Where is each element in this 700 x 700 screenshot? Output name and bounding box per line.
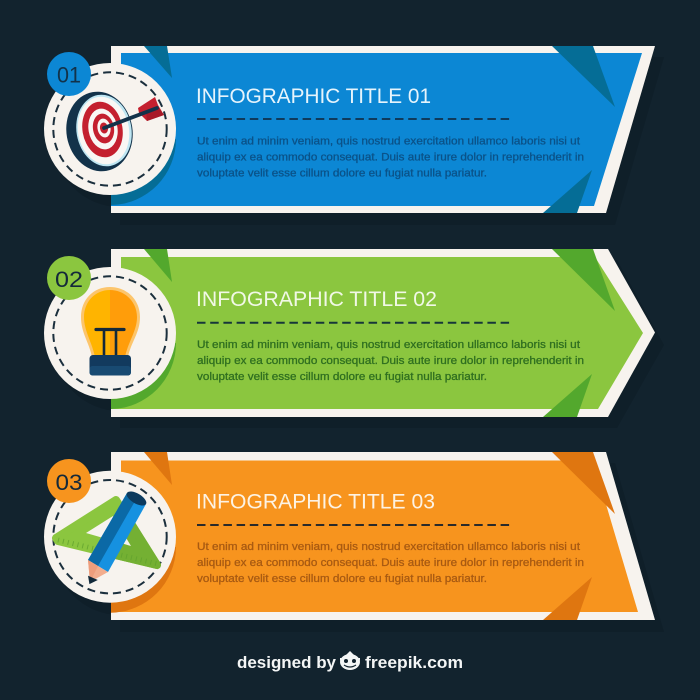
badge: number 03	[47, 459, 91, 503]
icon: freepik mascot	[340, 651, 360, 670]
icon: set square and pencil	[56, 489, 158, 583]
text block: body 02	[197, 339, 584, 383]
text block: body 02: Ut enim ad minim veniam, quis nostrud exercitation ullamco laboris nisi ut	[197, 339, 580, 351]
badge: number 03: 03	[56, 470, 82, 495]
heading: title 02: INFOGRAPHIC TITLE 02	[196, 288, 437, 311]
badge: number 02	[47, 256, 91, 300]
footer: designed by freepik.com: designed by	[237, 654, 337, 672]
icon: target with arrow	[60, 86, 164, 177]
badge: number 01: 01	[57, 62, 81, 88]
text block: body 01: Ut enim ad minim veniam, quis nostrud exercitation ullamco laboris nisi ut	[197, 136, 580, 148]
badge: number 02: 02	[55, 267, 83, 292]
text block: body 03: voluptate velit esse cillum dolore eu fugiat nulla pariatur.	[197, 573, 487, 585]
text block: body 01: voluptate velit esse cillum dolore eu fugiat nulla pariatur.	[197, 168, 487, 180]
footer: designed by freepik.com: freepik.com	[365, 654, 463, 672]
footer: designed by freepik.com	[237, 651, 463, 672]
text block: body 02: voluptate velit esse cillum dolore eu fugiat nulla pariatur.	[197, 371, 487, 383]
icon: light bulb	[81, 287, 140, 376]
text block: body 01	[197, 136, 584, 180]
heading: title 01: INFOGRAPHIC TITLE 01	[196, 85, 431, 108]
text block: body 03: Ut enim ad minim veniam, quis nostrud exercitation ullamco laboris nisi ut	[197, 541, 580, 553]
panel: banner 03	[44, 452, 664, 632]
text block: body 03	[197, 541, 584, 585]
panel: banner 01	[44, 46, 664, 225]
panel: banner 02	[44, 249, 664, 428]
heading: title 03: INFOGRAPHIC TITLE 03	[196, 490, 435, 514]
badge: number 01	[47, 52, 91, 96]
text block: body 03: aliquip ex ea commodo consequat. Duis aute irure dolor in reprehenderit in	[197, 557, 584, 569]
text block: body 02: aliquip ex ea commodo consequat. Duis aute irure dolor in reprehenderit in	[197, 355, 584, 367]
text block: body 01: aliquip ex ea commodo consequat. Duis aute irure dolor in reprehenderit in	[197, 152, 584, 164]
